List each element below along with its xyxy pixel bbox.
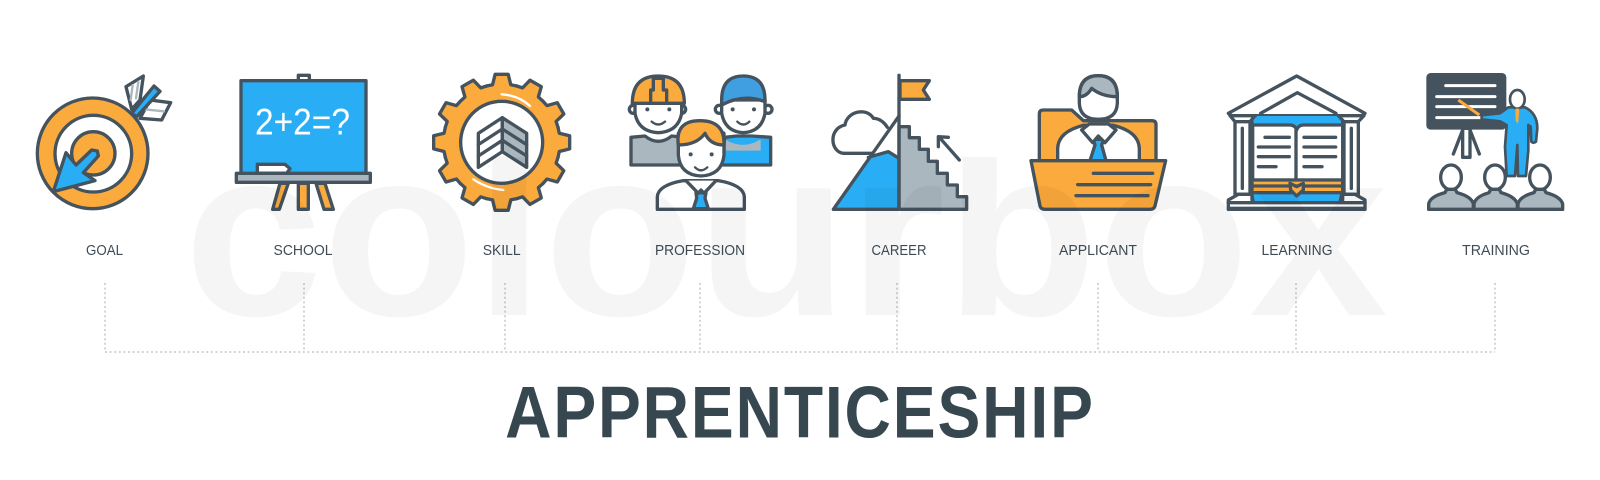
- title: APPRENTICESHIP: [505, 372, 1093, 453]
- front person: [657, 121, 744, 209]
- connector: dotted bracket: [105, 283, 1495, 352]
- label: goal: GOAL: [86, 242, 123, 259]
- icon: goal target with arrow: [37, 76, 171, 209]
- left worker: [629, 76, 686, 165]
- label: school: SCHOOL: [274, 242, 332, 259]
- icon: learning library and open book: [1228, 76, 1365, 210]
- label: profession: PROFESSION: [655, 242, 745, 259]
- label: training: TRAINING: [1462, 242, 1530, 259]
- label: learning: LEARNING: [1262, 242, 1332, 259]
- icon: training presenter and audience: [1428, 75, 1563, 209]
- watermark: colourbox: [184, 98, 1388, 366]
- label: applicant: APPLICANT: [1059, 242, 1137, 259]
- label: skill: SKILL: [483, 242, 521, 259]
- right worker: [715, 76, 772, 165]
- icon: career mountain with flag and stairs: [833, 75, 967, 209]
- icon: profession group of three workers: [629, 76, 772, 209]
- icon: skill gear: [434, 74, 570, 210]
- icon: applicant in folder: [1031, 76, 1166, 209]
- label: career: CAREER: [872, 242, 927, 259]
- icon: school blackboard: 2+2=?: [255, 101, 350, 143]
- icon: school blackboard: [236, 75, 370, 209]
